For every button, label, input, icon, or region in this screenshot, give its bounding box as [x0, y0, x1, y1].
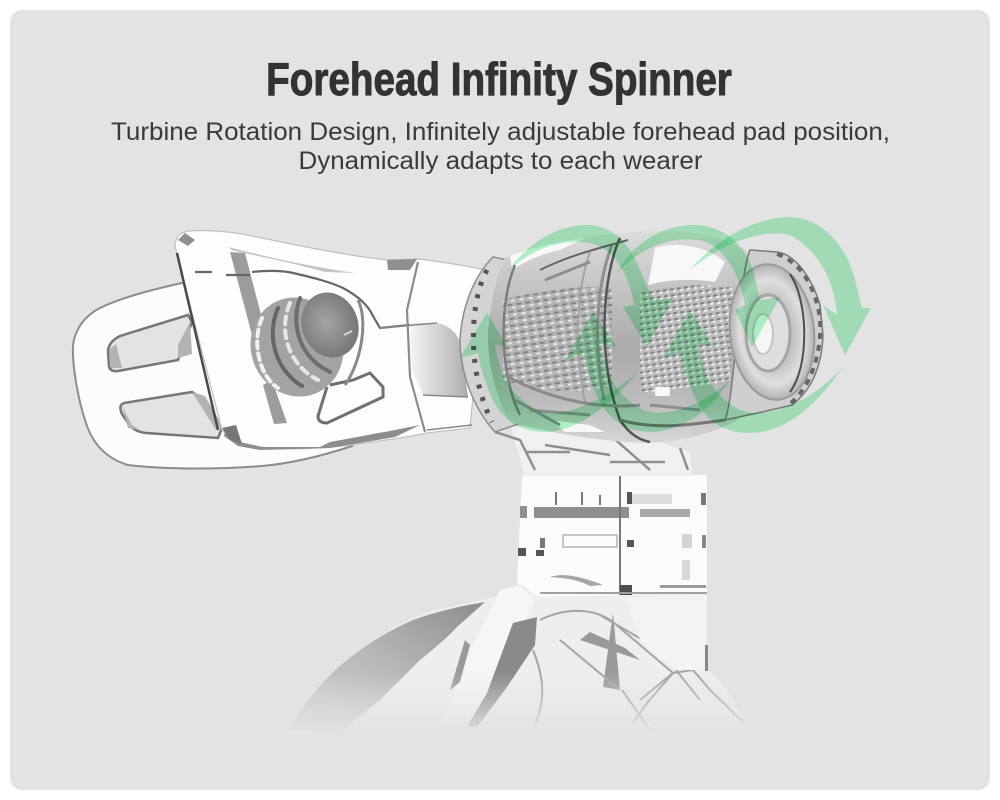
side flange	[460, 257, 530, 432]
lens center	[753, 314, 773, 354]
ribbed section right	[640, 285, 735, 392]
arrow: middle lower arc	[565, 312, 730, 432]
arrow: left lower arc	[460, 312, 637, 432]
frame small marks	[195, 271, 410, 328]
knob threaded body	[237, 284, 357, 410]
strap shaded tabs	[109, 322, 222, 430]
knob dome head	[292, 284, 368, 366]
knob highlight	[344, 331, 352, 335]
neck under cylinder	[510, 425, 692, 476]
arrow: middle upper arc	[617, 225, 780, 347]
mask frame lower section	[290, 473, 748, 735]
mask stem block	[517, 475, 707, 597]
cylinder highlights	[510, 238, 725, 432]
connector channel	[410, 323, 468, 397]
mask dome	[290, 590, 748, 735]
frame left dark edge	[177, 253, 218, 430]
mask edge accent	[705, 645, 708, 671]
mask inner accents	[450, 600, 665, 690]
cylinder ring lines	[504, 238, 725, 442]
stem details	[518, 473, 707, 595]
adjuster arm	[345, 300, 363, 385]
frame bottom corner shade	[222, 425, 242, 444]
strap upper slot	[108, 315, 192, 371]
flange ribs	[473, 270, 492, 422]
strap lower slot	[120, 392, 222, 438]
end cap scalloped rim	[777, 254, 820, 404]
mask white struts	[440, 585, 535, 730]
mask left shoulder band	[290, 602, 485, 733]
adjuster clip	[318, 373, 383, 423]
lens outer arc	[790, 274, 804, 392]
arrow: right lower arc	[663, 310, 843, 433]
frame bottom accents	[224, 425, 420, 450]
channel lines	[380, 323, 472, 430]
subtitle	[111, 118, 890, 175]
frame top corner accents	[178, 233, 417, 270]
mask lower right panel	[625, 595, 707, 670]
lens inner rings	[746, 295, 790, 371]
forehead pad frame	[175, 230, 485, 450]
neck details	[495, 432, 688, 470]
frame divider	[407, 262, 425, 432]
frame striped band top	[230, 252, 287, 424]
rotation arrows	[460, 217, 871, 433]
forehead strap	[73, 283, 352, 468]
subtitle: Dynamically adapts to each wearer	[298, 147, 702, 175]
title: Forehead Infinity Spinner	[266, 54, 732, 105]
cylinder body	[488, 231, 750, 443]
strap outer shape	[73, 283, 352, 468]
end cap outer	[725, 250, 823, 420]
arrow: right upper arc	[690, 217, 871, 355]
mask dark strut	[467, 617, 537, 727]
frame body	[175, 230, 485, 449]
arrow: left upper arc	[507, 225, 673, 347]
mask inner ribs	[533, 611, 743, 730]
subtitle: Turbine Rotation Design, Infinitely adjustable forehead pad position,	[111, 118, 890, 146]
ribbed section left	[503, 287, 612, 391]
frame top highlight	[228, 247, 355, 273]
knob thread rings	[257, 298, 330, 388]
end cap lens	[723, 260, 821, 404]
adjustment knob	[237, 284, 368, 410]
turbine cylinder	[460, 231, 823, 476]
mask bottom fade	[270, 672, 770, 744]
